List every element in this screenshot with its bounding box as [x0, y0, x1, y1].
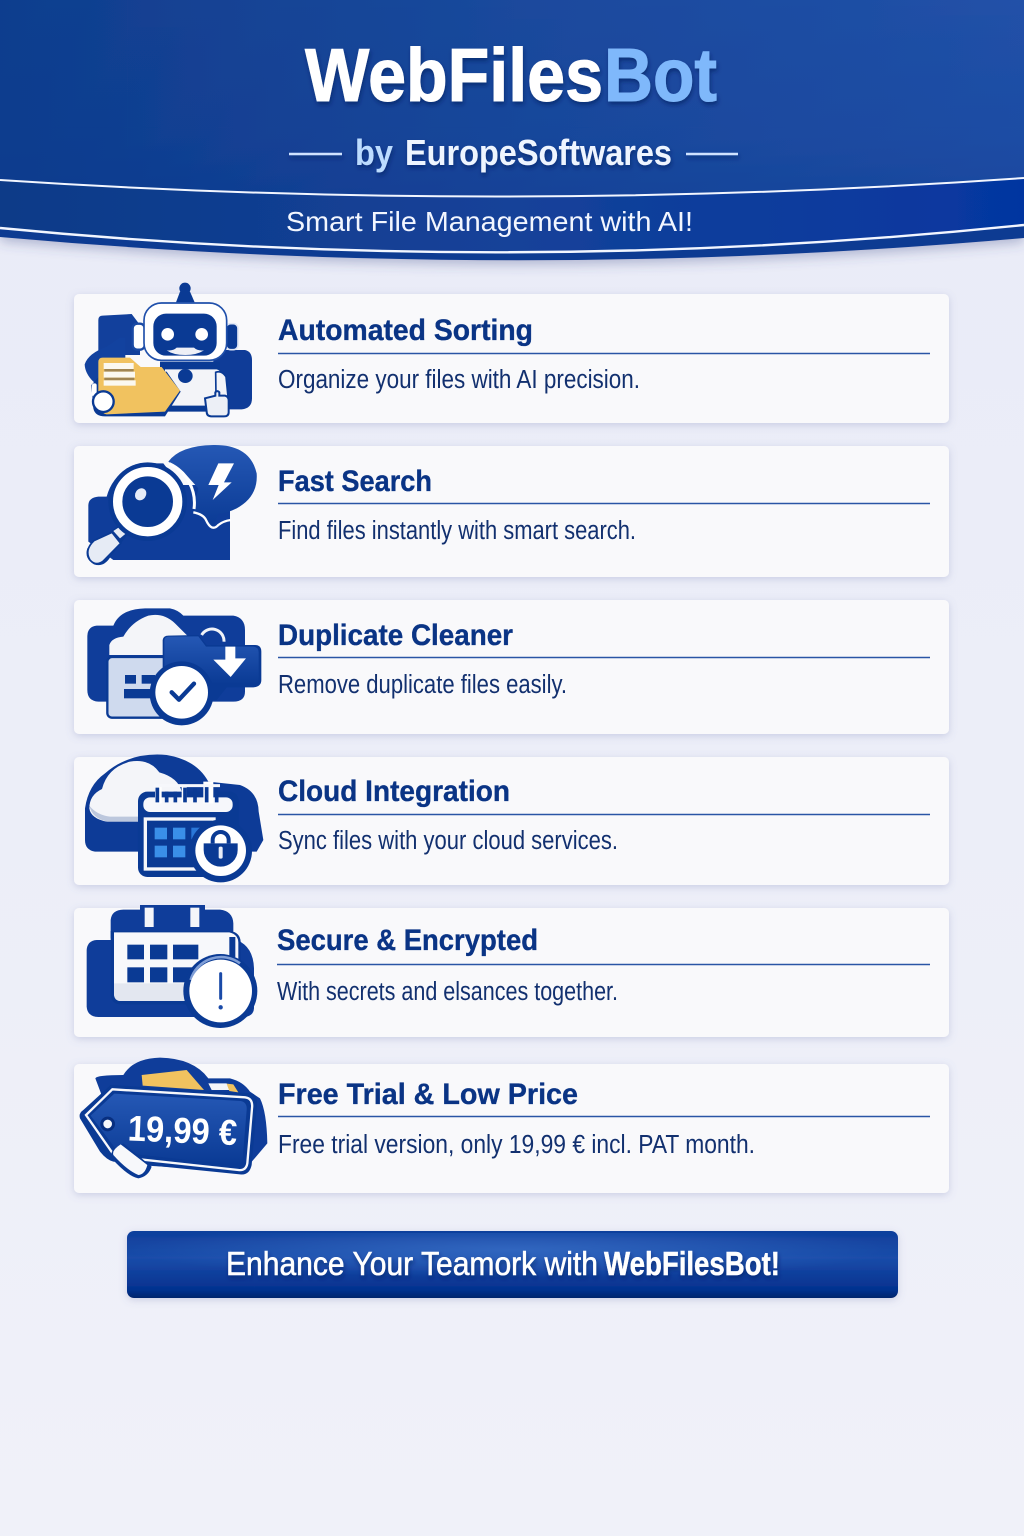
- panel: Free Trial & Low Price: [74, 1058, 949, 1193]
- icon: cloud, calendar and padlock: [85, 755, 263, 882]
- description: Fast Search: Find files instantly with smart search.: [278, 517, 636, 545]
- panel: Cloud Integration: [74, 755, 949, 885]
- title: WebFiles: [305, 33, 603, 117]
- panel: Secure & Encrypted: [74, 905, 949, 1037]
- heading: Secure & Encrypted: Secure & Encrypted: [277, 924, 538, 957]
- panel: Automated Sorting: [74, 283, 949, 423]
- heading: Automated Sorting: Automated Sorting: [278, 314, 533, 347]
- panel: Duplicate Cleaner: [74, 600, 949, 734]
- header banner: [0, 0, 1024, 260]
- icon: magnifier with speech bubble: [86, 445, 257, 565]
- subtitle: by EuropeSoftwares: [289, 132, 738, 173]
- title: Bot: [604, 33, 717, 117]
- description: Free Trial & Low Price: Free trial version, only 19,99 € incl. PAT month.: [278, 1131, 755, 1159]
- description: Duplicate Cleaner: Remove duplicate files easily.: [278, 671, 567, 699]
- icon: robot with folder: [85, 283, 252, 416]
- description: Secure & Encrypted: With secrets and elsances together.: [277, 978, 618, 1006]
- button text: Enhance Your Teamork with: [226, 1245, 598, 1282]
- icon: calendar with alert badge: [87, 905, 257, 1028]
- heading: Fast Search: Fast Search: [278, 465, 432, 498]
- button text: WebFilesBot!: [604, 1245, 780, 1282]
- description: Automated Sorting: Organize your files with AI precision.: [278, 366, 640, 394]
- heading: Free Trial & Low Price: Free Trial & Low Price: [278, 1078, 578, 1111]
- subtitle: by EuropeSoftwares: EuropeSoftwares: [405, 132, 672, 173]
- description: Cloud Integration: Sync files with your cloud services.: [278, 827, 618, 855]
- price label: 19,99 €: [127, 1107, 238, 1153]
- tagline: Smart File Management with AI!: [286, 206, 693, 237]
- call to action button: [127, 1231, 898, 1298]
- heading: Duplicate Cleaner: Duplicate Cleaner: [278, 619, 513, 652]
- header background shape: [0, 0, 1024, 260]
- heading: Cloud Integration: Cloud Integration: [278, 775, 510, 808]
- subtitle: by EuropeSoftwares: by: [355, 132, 393, 173]
- panel: Fast Search: [74, 445, 949, 577]
- icon: cloud, file and check badge: [87, 608, 261, 725]
- icon: price tag with folder: [80, 1058, 267, 1178]
